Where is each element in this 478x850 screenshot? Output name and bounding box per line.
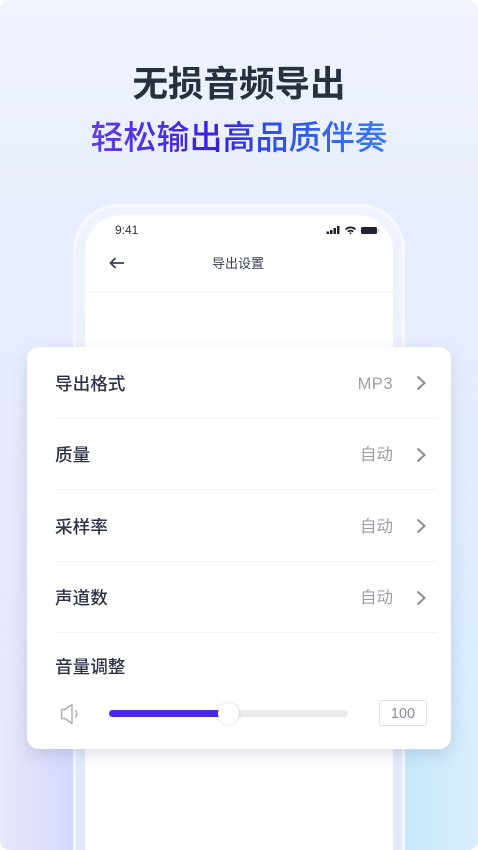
row: channels: 声道数 (55, 588, 108, 608)
chevron (416, 518, 426, 534)
row: quality (55, 445, 426, 465)
background tint: lower colour wash (6, 490, 478, 850)
row: sample rate (55, 517, 426, 537)
row: channels: 自动 (360, 589, 393, 607)
chevron (416, 376, 426, 390)
header divider (85, 291, 393, 292)
screen title: 导出设置 (212, 256, 264, 271)
volume value box: 100 (391, 706, 415, 722)
volume slider (109, 702, 348, 726)
chevron (416, 590, 426, 606)
row: quality: 自动 (360, 446, 393, 464)
back arrow icon (109, 257, 124, 269)
settings card (27, 347, 451, 749)
row: export format: MP3 (358, 375, 393, 393)
slider track (109, 710, 348, 717)
slider thumb (218, 703, 239, 724)
row: sample rate: 自动 (360, 518, 393, 536)
volume heading: 音量调整 (55, 657, 125, 677)
icon: speaker (60, 704, 78, 724)
row: channels (55, 588, 426, 608)
title: 无损音频导出 (132, 64, 346, 104)
chevron (416, 448, 426, 462)
row: sample rate: 采样率 (55, 517, 108, 537)
row: export format (55, 374, 426, 394)
status bar time: 9:41 (115, 223, 138, 237)
row: quality: 质量 (55, 445, 90, 465)
phone frame (73, 204, 405, 850)
volume value box (379, 700, 427, 726)
row: export format: 导出格式 (55, 374, 125, 394)
status bar icons (326, 226, 379, 234)
phone screen (85, 215, 393, 850)
subtitle: 轻松输出高品质伴奏 (90, 119, 388, 156)
slider fill (109, 710, 224, 717)
